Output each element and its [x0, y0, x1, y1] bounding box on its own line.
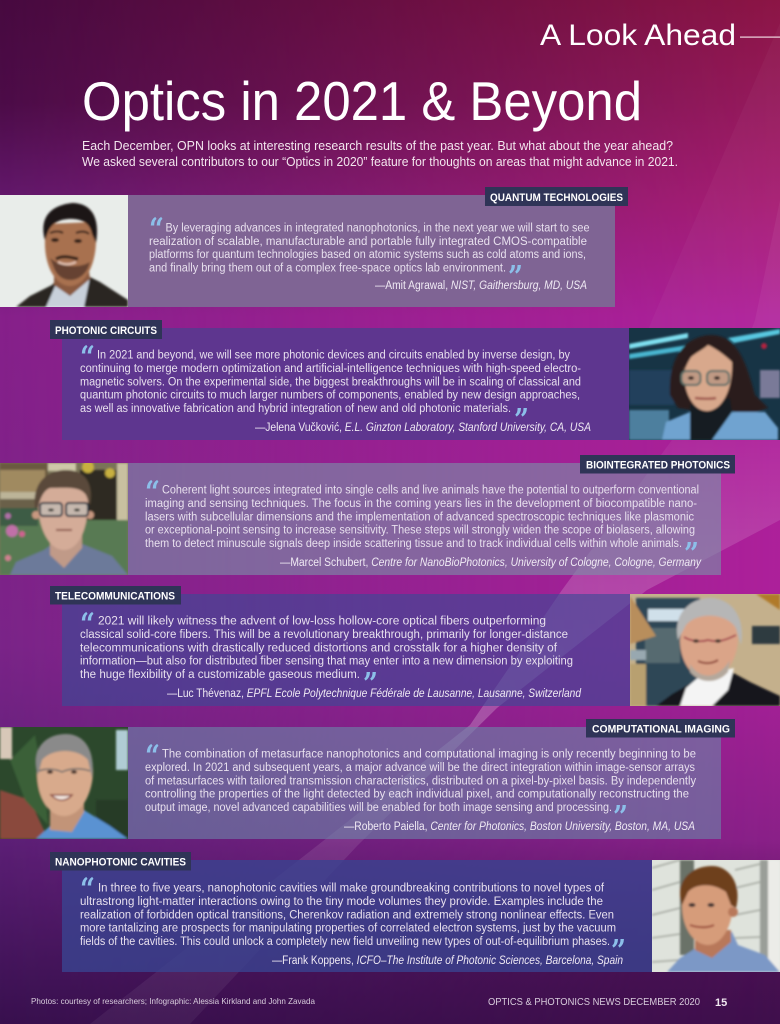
footer: credits: Photos: courtesy of researchers; Infographic: Alessia Kirkland and John Zavada — [31, 996, 315, 1006]
quote mark close: ” — [611, 934, 626, 969]
quote text: lasers with subcellular dimensions and the implementation of advanced spectroscopic techniques like plasmonic — [145, 512, 694, 524]
panel: nanophotonic cavities — [50, 852, 780, 972]
quote mark open: “ — [80, 340, 95, 375]
tag — [586, 719, 735, 738]
quote mark close: ” — [508, 260, 523, 295]
panel: telecommunications — [50, 586, 780, 706]
tag — [50, 586, 181, 604]
quote text: them to detect minuscule signals deep inside scattering tissue and to track individual cells within whole animals. — [145, 538, 682, 550]
attribution: —Marcel Schubert, Centre for NanoBioPhotonics, University of Cologne, Cologne, Germany — [280, 557, 702, 569]
tag: QUANTUM TECHNOLOGIES — [490, 192, 623, 204]
quote text: output image, novel advanced capabilities will be enabled for both image sensing and processing. — [145, 802, 612, 814]
quote mark open: “ — [145, 739, 160, 774]
quote text: fields of the cavities. This could unlock a completely new field unveiling new types of out-of-equilibrium phases. — [80, 936, 610, 948]
quote text: In three to five years, nanophotonic cavities will make groundbreaking contributions to novel types of — [98, 882, 605, 894]
quote text: imaging and sensing techniques. The focus in the coming years lies in the development of biocompatible nano- — [145, 498, 697, 510]
title: Optics in 2021 & Beyond — [82, 70, 642, 132]
attribution: —Roberto Paiella, Center for Photonics, Boston University, Boston, MA, USA — [344, 821, 695, 833]
quote mark open: “ — [149, 212, 164, 247]
quote text: and finally bring them out of a complex free-space optics lab environment. — [149, 262, 506, 274]
tag: NANOPHOTONIC CAVITIES — [55, 856, 186, 868]
quote text: or exceptional-point sensing to increase sensitivity. These steps will strongly widen the scope of biolasers, allowing — [145, 524, 695, 536]
portrait: Jelena Vuckovic — [629, 328, 780, 440]
quote text: The combination of metasurface nanophotonics and computational imaging is only recently beginning to be — [162, 748, 696, 760]
quote text: Coherent light sources integrated into single cells and live animals have the potential to outperform conventional — [162, 484, 699, 496]
quote box — [128, 463, 721, 575]
quote text — [149, 222, 590, 274]
quote mark open: “ — [80, 607, 95, 642]
footer: page number: 15 — [715, 997, 727, 1009]
quote text: In 2021 and beyond, we will see more photonic devices and circuits enabled by inverse design, by — [97, 350, 570, 362]
quote box — [62, 328, 629, 440]
intro text: We asked several contributors to our “Optics in 2020” feature for thoughts on areas that might advance in 2021. — [82, 154, 678, 169]
tag: COMPUTATIONAL IMAGING — [592, 724, 730, 736]
attribution: —Jelena Vučković, E.L. Ginzton Laboratory, Stanford University, CA, USA — [255, 422, 591, 434]
quote box — [62, 860, 652, 972]
attribution: —Frank Koppens, ICFO–The Institute of Photonic Sciences, Barcelona, Spain — [272, 955, 623, 967]
quote box — [62, 594, 630, 706]
portrait: Roberto Paiella — [0, 727, 128, 839]
tag: BIOINTEGRATED PHOTONICS — [586, 460, 730, 472]
quote text: classical solid-core fibers. This will be a revolutionary breakthrough, primarily for longer-distance — [80, 629, 568, 641]
tag: TELECOMMUNICATIONS — [55, 590, 175, 602]
footer: publication line: OPTICS & PHOTONICS NEWS DECEMBER 2020 — [488, 997, 700, 1008]
attribution: —Luc Thévenaz, EPFL Ecole Polytechnique Fédérale de Lausanne, Lausanne, Switzerland — [167, 688, 582, 700]
quote text: telecommunications with drastically reduced distortions and crosstalk for a higher density of — [80, 642, 558, 654]
quote text: of metasurfaces with tailored transmission characteristics, distributed on a pixel-by-pixel basis. By independently — [145, 776, 696, 788]
quote mark close: ” — [613, 800, 628, 835]
quote text — [80, 882, 616, 948]
quote mark close: ” — [684, 537, 699, 572]
portrait: Amit Agrawal — [0, 195, 128, 307]
quote mark open: “ — [80, 872, 95, 907]
tag — [50, 852, 191, 870]
quote text: realization of scalable, manufacturable and portable fully integrated CMOS-compatible — [149, 236, 587, 248]
tag — [485, 187, 628, 206]
quote text: continuing to merge modern optimization and artificial-intelligence techniques with high-speed electro- — [80, 363, 581, 375]
quote text: explored. In 2021 and subsequent years, a major advance will be the direct integration within image-sensor arrays — [145, 762, 695, 774]
quote text: realization of forbidden optical transitions, Cherenkov radiation and extremely strong nonlinear effects. Even — [80, 910, 614, 922]
panel: photonic circuits — [50, 320, 780, 440]
attribution: —Amit Agrawal, NIST, Gaithersburg, MD, USA — [375, 280, 587, 292]
portrait: Frank Koppens — [652, 860, 780, 972]
quote text: as well as innovative fabrication and hybrid integration of new and old photonic materials. — [80, 403, 511, 415]
quote text: ultrastrong light-matter interactions owing to the tiny mode volumes they provide. Examples include the — [80, 896, 603, 908]
quote text — [145, 748, 696, 814]
intro text — [82, 138, 678, 169]
quote box — [128, 727, 721, 839]
tag — [580, 455, 735, 474]
quote mark open: “ — [145, 475, 160, 510]
section label: A Look Ahead: A Look Ahead — [540, 19, 736, 52]
quote text: the huge flexibility of a customizable gaseous medium. — [80, 669, 360, 681]
intro text: Each December, OPN looks at interesting research results of the past year. But what about the year ahead? — [82, 138, 673, 153]
quote mark close: ” — [514, 403, 529, 438]
quote text: controlling the properties of the light detected by each individual pixel, and computationally reconstructing the — [145, 788, 689, 800]
panel: computational imaging — [0, 719, 735, 839]
quote text: magnetic solvers. On the experimental side, the biggest breakthroughs will be in scaling of classical and — [80, 376, 581, 388]
quote text — [80, 350, 581, 415]
quote text: more tantalizing are prospects for manipulating properties of correlated electron systems, just by the vacuum — [80, 922, 616, 934]
quote text — [80, 616, 573, 681]
portrait: Marcel Schubert — [0, 461, 128, 575]
quote text: information—but also for distributed fiber sensing that may enter into a new dimension by exploiting — [80, 656, 573, 668]
quote text: 2021 will likely witness the advent of low-loss hollow-core optical fibers outperforming — [98, 616, 546, 628]
quote text: By leveraging advances in integrated nanophotonics, in the next year we will start to see — [166, 222, 590, 234]
panel: biointegrated photonics — [0, 455, 735, 575]
portrait: Luc Thevenaz — [630, 594, 780, 706]
tag — [50, 320, 162, 339]
quote mark close: ” — [363, 667, 378, 702]
quote box — [128, 195, 615, 307]
panel: quantum technologies — [0, 187, 628, 307]
quote text: platforms for quantum technologies based on atomic systems such as cold atoms and ions, — [149, 249, 586, 261]
quote text — [145, 484, 699, 550]
tag: PHOTONIC CIRCUITS — [55, 325, 157, 337]
quote text: quantum photonic circuits to much larger numbers of components, enabled by new design approaches, — [80, 390, 580, 402]
